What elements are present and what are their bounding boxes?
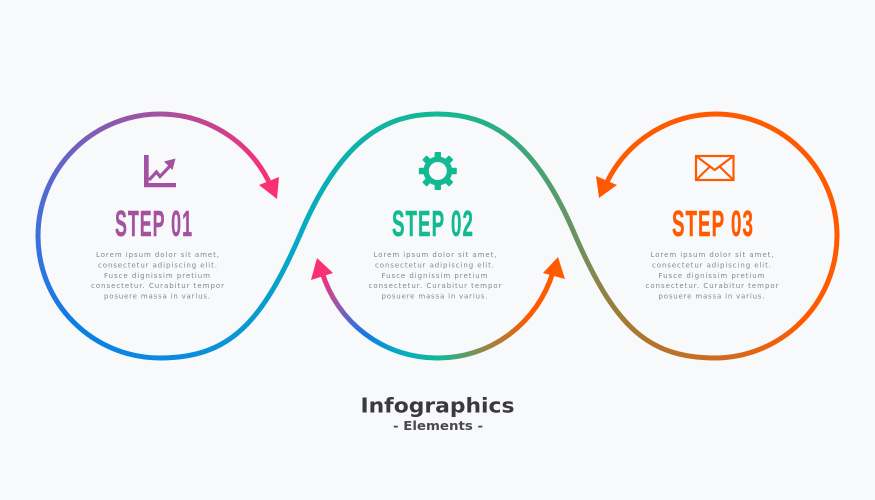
text: STEP 01 (115, 203, 193, 244)
step 1 text: Fusce dignissim pretium (104, 272, 210, 280)
step 1 text: posuere massa in varius. (104, 292, 210, 300)
step 3 text: Fusce dignissim pretium (658, 272, 765, 280)
step 2 text: Lorem ipsum dolor sit amet, (374, 251, 496, 259)
main flowing line with three loops (38, 114, 837, 358)
step 2 text: Fusce dignissim pretium (382, 272, 488, 280)
step 3 text: Lorem ipsum dolor sit amet, (650, 251, 774, 259)
step 3 heading: STEP 03 (672, 203, 754, 244)
step 1 text: Lorem ipsum dolor sit amet, (96, 251, 219, 259)
icon: gear (419, 152, 457, 190)
arrowhead: step 2 right (543, 257, 565, 279)
arrowhead: step 1 (259, 177, 279, 199)
icon: envelope (696, 156, 734, 180)
step 2 text (368, 251, 502, 300)
step 1 text: consectetur. Curabitur tempor (91, 282, 224, 290)
step 1 text: consectetur adipiscing elit. (98, 262, 217, 270)
step 1 text (91, 251, 224, 300)
step 3 text: consectetur. Curabitur tempor (646, 282, 779, 290)
step 3 text (646, 251, 779, 300)
lower arc of step 2 (322, 272, 553, 358)
step 2 heading: STEP 02 (392, 203, 474, 244)
step 3 text: posuere massa in varius. (658, 292, 764, 300)
arrowhead: step 2 left (311, 258, 333, 280)
step 2 text: consectetur adipiscing elit. (375, 262, 494, 270)
title: Infographics (360, 394, 514, 418)
subtitle: - Elements - (393, 419, 483, 433)
icon: growth chart (144, 155, 176, 187)
step 3 text: consectetur adipiscing elit. (652, 262, 771, 270)
step 2 text: consectetur. Curabitur tempor (368, 282, 502, 290)
arrowhead: step 3 (596, 176, 617, 198)
step 2 text: posuere massa in varius. (382, 292, 488, 300)
